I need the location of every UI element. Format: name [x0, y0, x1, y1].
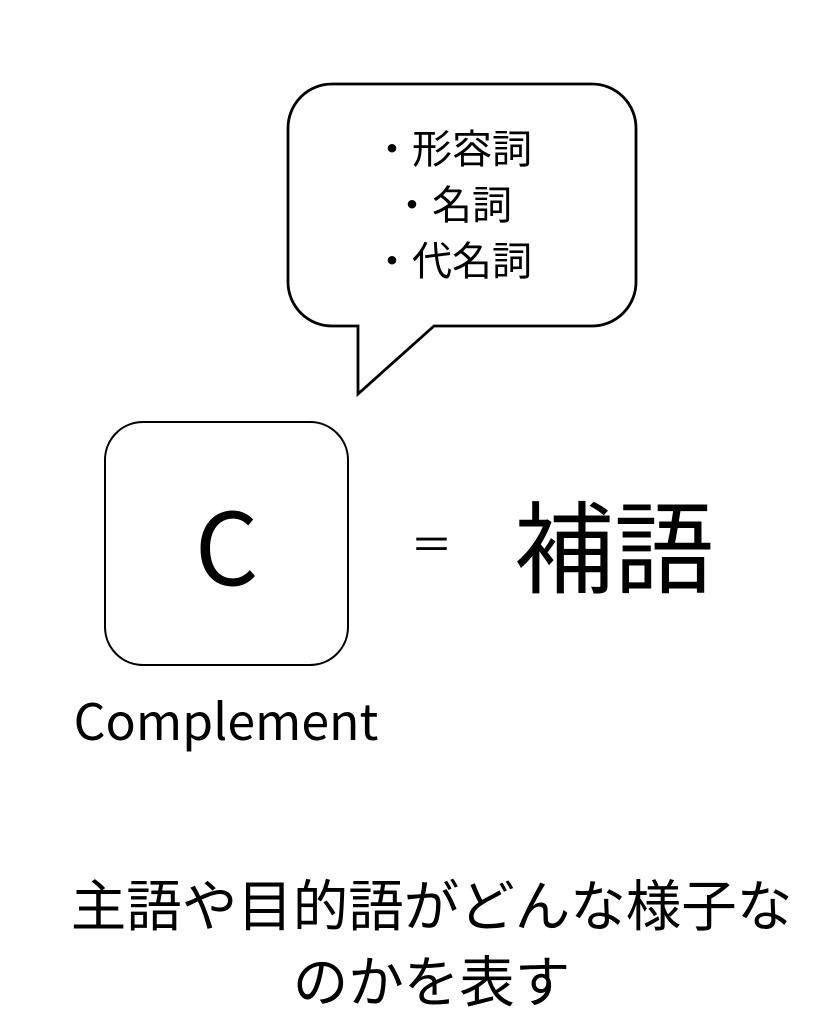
letter C: C [195, 469, 258, 614]
description text [71, 862, 792, 1018]
heading: complement in Japanese: 補語 [514, 469, 714, 614]
list item: noun: ・名詞 [392, 173, 512, 231]
speech bubble list [372, 117, 532, 287]
label: Complement: Complement [74, 683, 378, 755]
description line 1: 主語や目的語がどんな様子な [71, 862, 792, 942]
list item: adjective: ・形容詞 [372, 117, 532, 175]
list item: pronoun: ・代名詞 [372, 229, 532, 287]
letter box C [104, 421, 349, 666]
description line 2: のかを表す [293, 938, 570, 1018]
equals sign: ＝ [410, 512, 452, 573]
